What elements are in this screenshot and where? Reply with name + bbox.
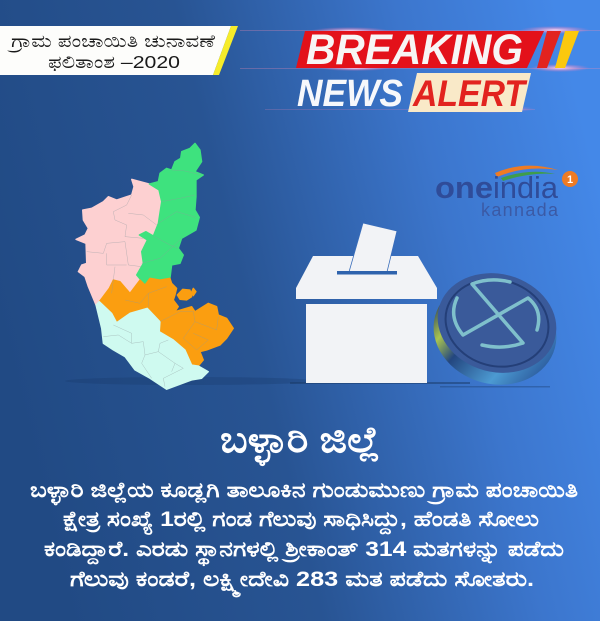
- body paragraph: [30, 479, 578, 598]
- header banner: election title: ಫಲಿತಾಂಶ –2020: [48, 52, 180, 72]
- logo: oneindia kannada: 1: [567, 174, 573, 186]
- region: pink north-west: [76, 179, 162, 305]
- body paragraph: ಗೆಲುವು ಕಂಡರೆ, ಲಕ್ಷ್ಮೀದೇವಿ 283 ಮತ ಪಡೆದು ಸೋತರು.: [70, 568, 534, 598]
- breaking news alert badge: ALERT: [412, 73, 528, 114]
- breaking news alert badge: [240, 26, 600, 115]
- logo: oneindia kannada: one: [435, 170, 493, 205]
- logo: oneindia kannada: india: [493, 170, 559, 205]
- body paragraph: ಕ್ಷೇತ್ರ ಸಂಖ್ಯೆ 1ರಲ್ಲಿ ಗಂಡ ಗೆಲುವು ಸಾಧಿಸಿದ್ದು, ಹೆಂಡತಿ ಸೋಲು: [63, 508, 539, 535]
- body paragraph: ಬಳ್ಳಾರಿ ಜಿಲ್ಲೆಯ ಕೂಡ್ಲಗಿ ತಾಲೂಕಿನ ಗುಂಡುಮುಣು ಗ್ರಾಮ ಪಂಚಾಯಿತಿ: [30, 479, 578, 505]
- shadow under map: [65, 377, 315, 385]
- logo: oneindia kannada: kannada: [481, 200, 559, 220]
- region: orange central: [99, 278, 233, 366]
- breaking news alert badge: NEWS: [297, 73, 403, 115]
- region: mint south: [96, 302, 208, 389]
- icon: swastika election symbol: [454, 280, 539, 347]
- district borders: [87, 170, 218, 387]
- header banner: election title: [0, 26, 238, 75]
- breaking news alert badge: BREAKING: [306, 26, 523, 74]
- header banner: election title: ಗ್ರಾಮ ಪಂಚಾಯಿತಿ ಚುನಾವಣೆ: [6, 31, 215, 53]
- body paragraph: ಕಂಡಿದ್ದಾರೆ. ಎರಡು ಸ್ಥಾನಗಳಲ್ಲಿ ಶ್ರೀಕಾಂತ್ 314 ಮತಗಳನ್ನು ಪಡೆದು: [44, 538, 564, 567]
- region: green north-east: [137, 143, 203, 285]
- district heading: ಬಳ್ಳಾರಿ ಜಿಲ್ಲೆ: [220, 419, 380, 466]
- ballot box: [290, 223, 470, 384]
- map of Karnataka: [76, 143, 233, 389]
- EVM symbol coin: [422, 260, 568, 398]
- logo: oneindia kannada: [435, 166, 578, 220]
